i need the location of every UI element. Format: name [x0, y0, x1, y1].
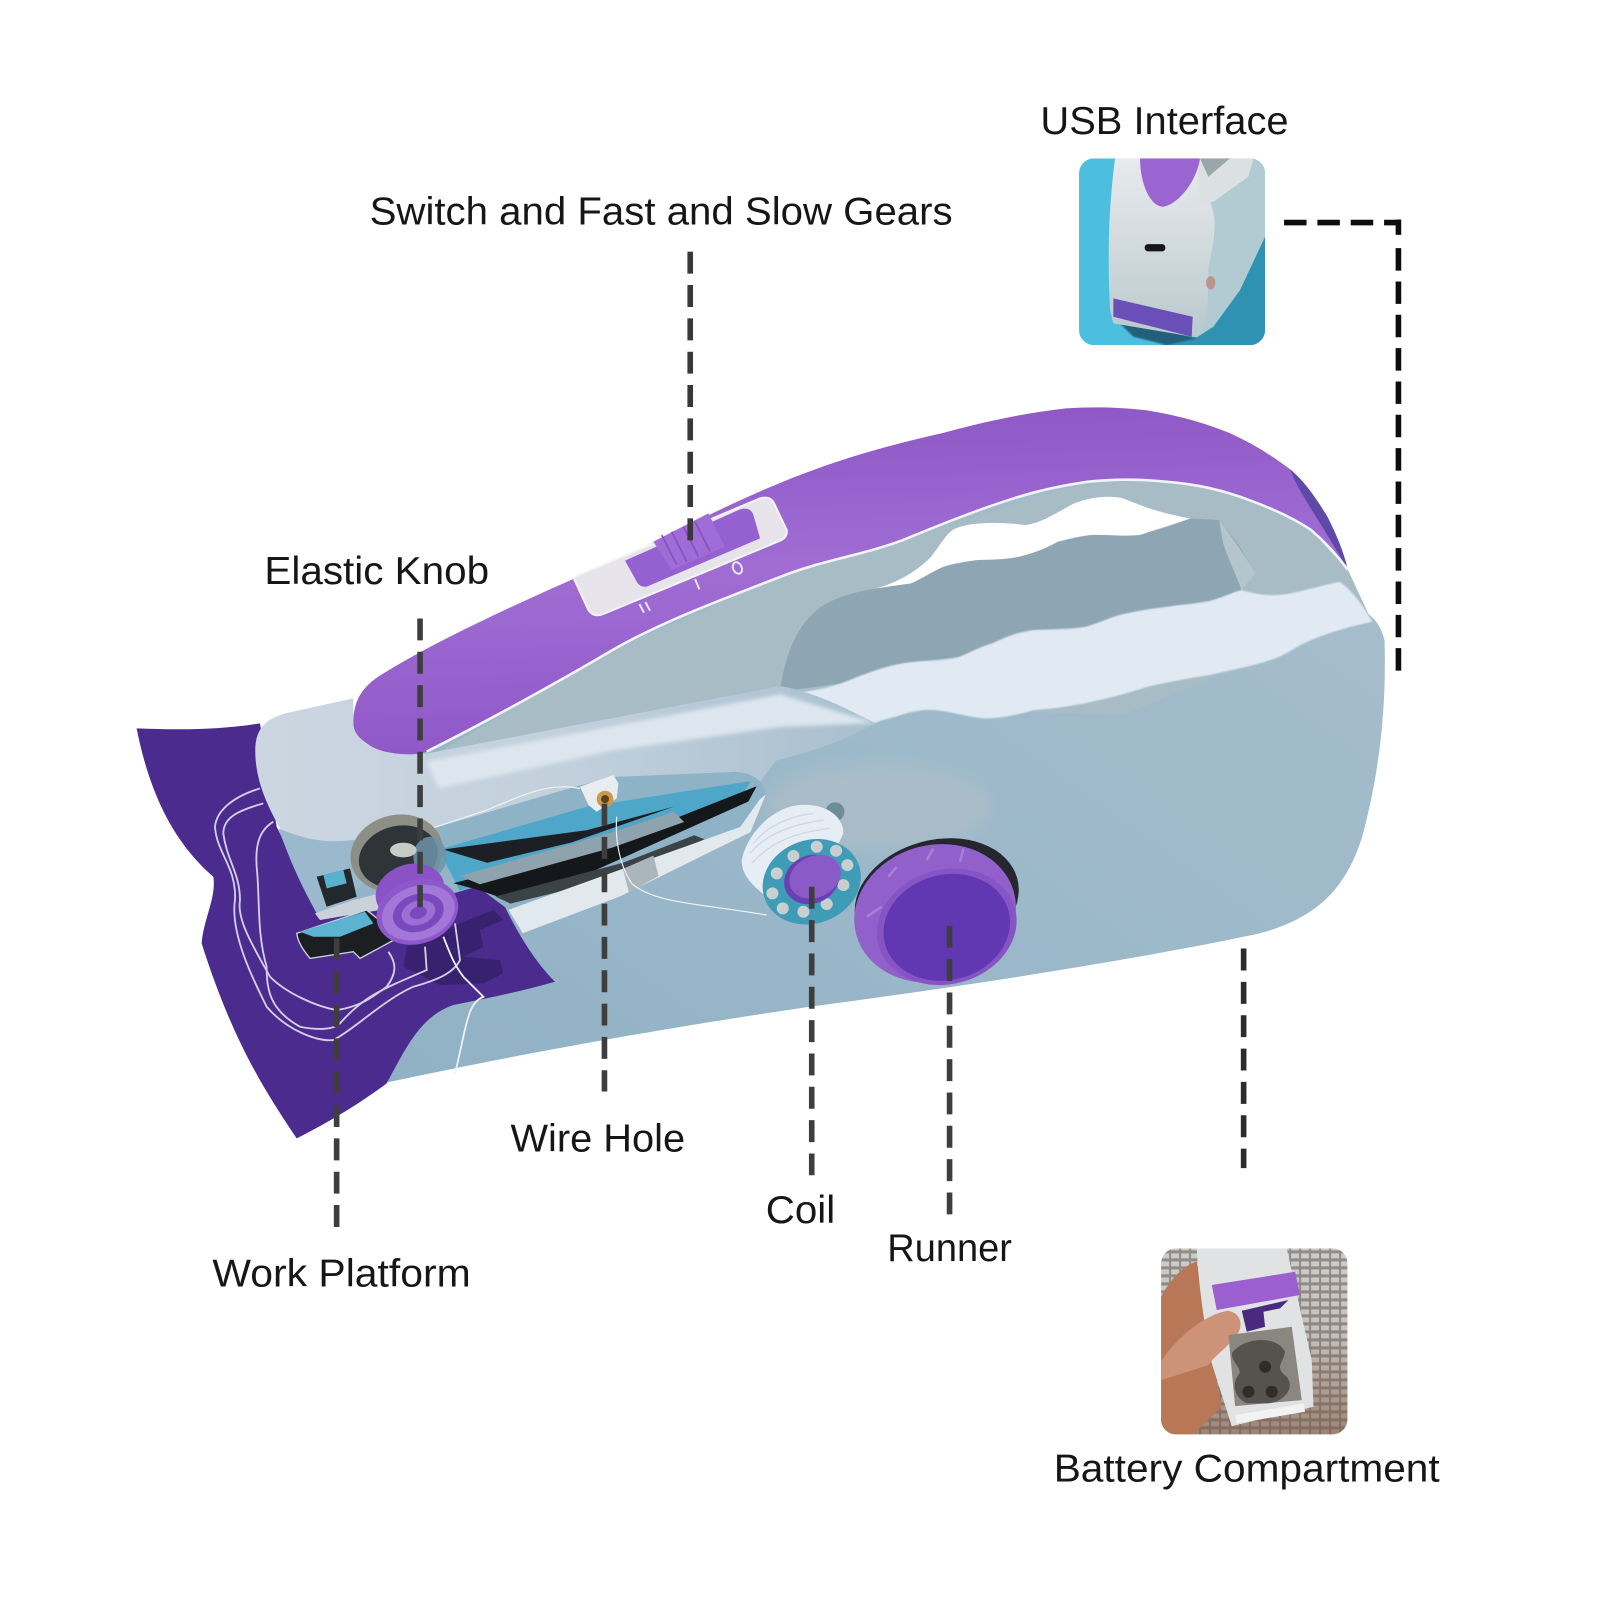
label: Runner: Runner [887, 1227, 1012, 1270]
gear mark I [695, 579, 699, 589]
leader line: work platform [334, 938, 339, 1227]
machine body [286, 449, 1385, 1082]
label: Battery Compartment: Battery Compartment [1054, 1448, 1440, 1491]
leader line: battery compartment [1241, 949, 1246, 1168]
leader line: USB interface [1284, 220, 1400, 674]
label: Wire Hole: Wire Hole [511, 1118, 685, 1161]
fabric [137, 723, 555, 1138]
upper dark blade [443, 807, 674, 863]
wire hole tab and thread [427, 775, 767, 915]
upper grey housing and handle [424, 482, 1368, 761]
handle recess [764, 497, 1372, 728]
gear mark II [639, 602, 650, 613]
label: Switch and Fast and Slow Gears: Switch and Fast and Slow Gears [370, 191, 953, 234]
label: Work Platform: Work Platform [212, 1253, 471, 1296]
handle opening [876, 497, 1191, 588]
white strip below slot [508, 794, 766, 933]
leader line: runner [947, 926, 952, 1216]
wire hole eyelet [597, 791, 613, 807]
chrome highlight [459, 812, 684, 884]
leader line: coil [809, 887, 814, 1175]
gear mark O [731, 561, 744, 575]
white strip on front band [427, 694, 875, 788]
photo: USB interface close-up [1079, 158, 1265, 345]
body shading under spool [766, 764, 990, 850]
presser block [317, 868, 357, 907]
switch slider [625, 509, 760, 587]
switch track [573, 498, 787, 615]
needle bay under the nose [278, 828, 400, 958]
photo: battery compartment close-up [1161, 1248, 1347, 1434]
presser foot [297, 910, 400, 958]
stitching [215, 788, 483, 1073]
label: Coil: Coil [766, 1189, 835, 1232]
runner wheel [839, 821, 1033, 1001]
label: Elastic Knob: Elastic Knob [264, 550, 489, 593]
label: USB Interface: USB Interface [1040, 100, 1289, 143]
leader line: switch [687, 252, 693, 541]
nose and front band [255, 686, 875, 844]
infographic: sewing machine parts diagram [136, 106, 1440, 1490]
sewing thread [427, 787, 767, 915]
purple top cover [353, 407, 1348, 755]
sewing machine illustration [137, 407, 1385, 1138]
leader line: elastic knob [417, 618, 423, 909]
coil spool [742, 802, 873, 938]
leader line: wire hole [602, 804, 607, 1091]
elastic knob [342, 804, 467, 955]
teal reflection [439, 781, 750, 890]
white grip band [764, 582, 1372, 728]
switch and speed marks [573, 498, 787, 615]
needle slot [427, 772, 766, 933]
main black bar [453, 786, 757, 899]
